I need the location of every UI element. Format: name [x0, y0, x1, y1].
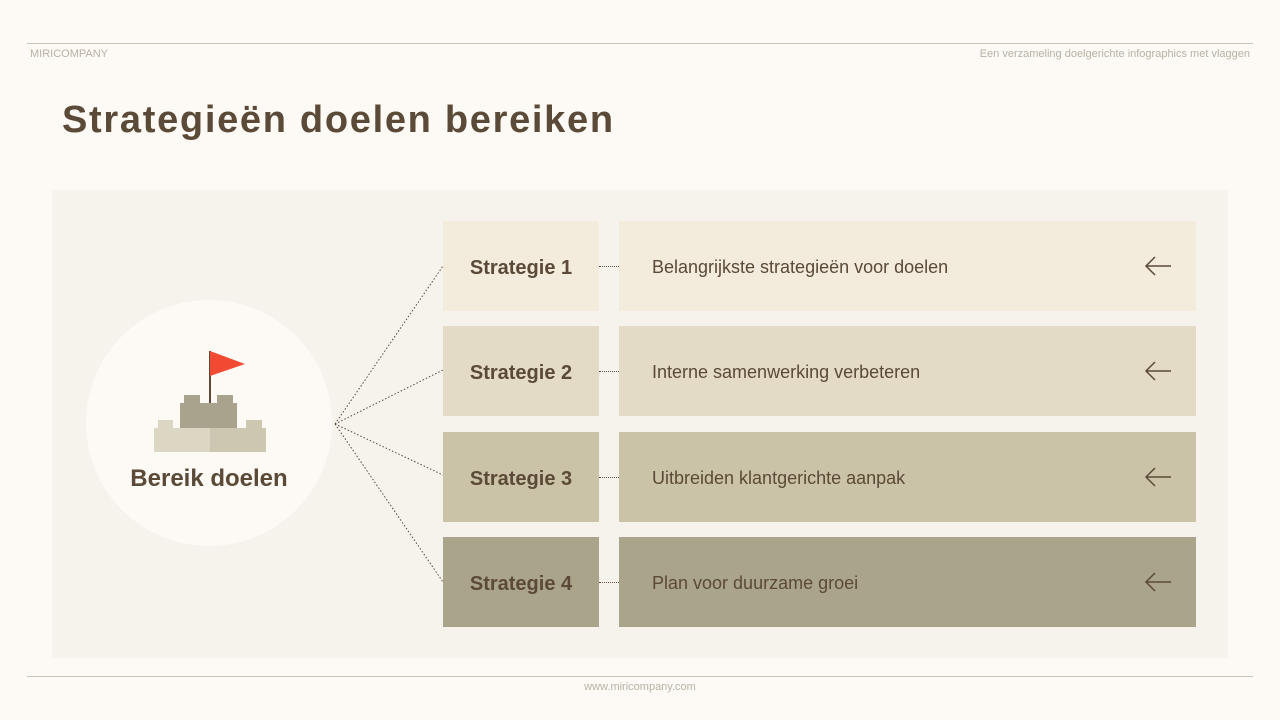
text: Strategie 4 — [470, 572, 572, 594]
panel: main — [52, 190, 1228, 658]
text: Plan voor duurzame groei — [652, 572, 858, 592]
text: Bereik doelen: Bereik doelen — [130, 465, 288, 492]
text: Strategie 1 — [470, 256, 572, 278]
header left: MIRICOMPANY — [30, 48, 108, 60]
text: Interne samenwerking verbeteren — [652, 362, 920, 382]
text: Belangrijkste strategieën voor doelen — [652, 256, 948, 276]
title: Strategieën doelen bereiken — [62, 99, 615, 141]
text: Strategie 3 — [470, 468, 572, 490]
header right: Een verzameling doelgerichte infographics met vlaggen — [980, 48, 1250, 60]
circle: goal — [86, 300, 332, 546]
icon: castle with flag — [154, 351, 266, 452]
strategy 1 — [443, 221, 1196, 311]
footer: www.miricompany.com — [584, 681, 696, 693]
strategy 2 — [443, 326, 1196, 416]
strategy 3 — [443, 432, 1196, 522]
text: Strategie 2 — [470, 362, 572, 384]
strategy 4 — [443, 537, 1196, 627]
text: Uitbreiden klantgerichte aanpak — [652, 468, 905, 488]
